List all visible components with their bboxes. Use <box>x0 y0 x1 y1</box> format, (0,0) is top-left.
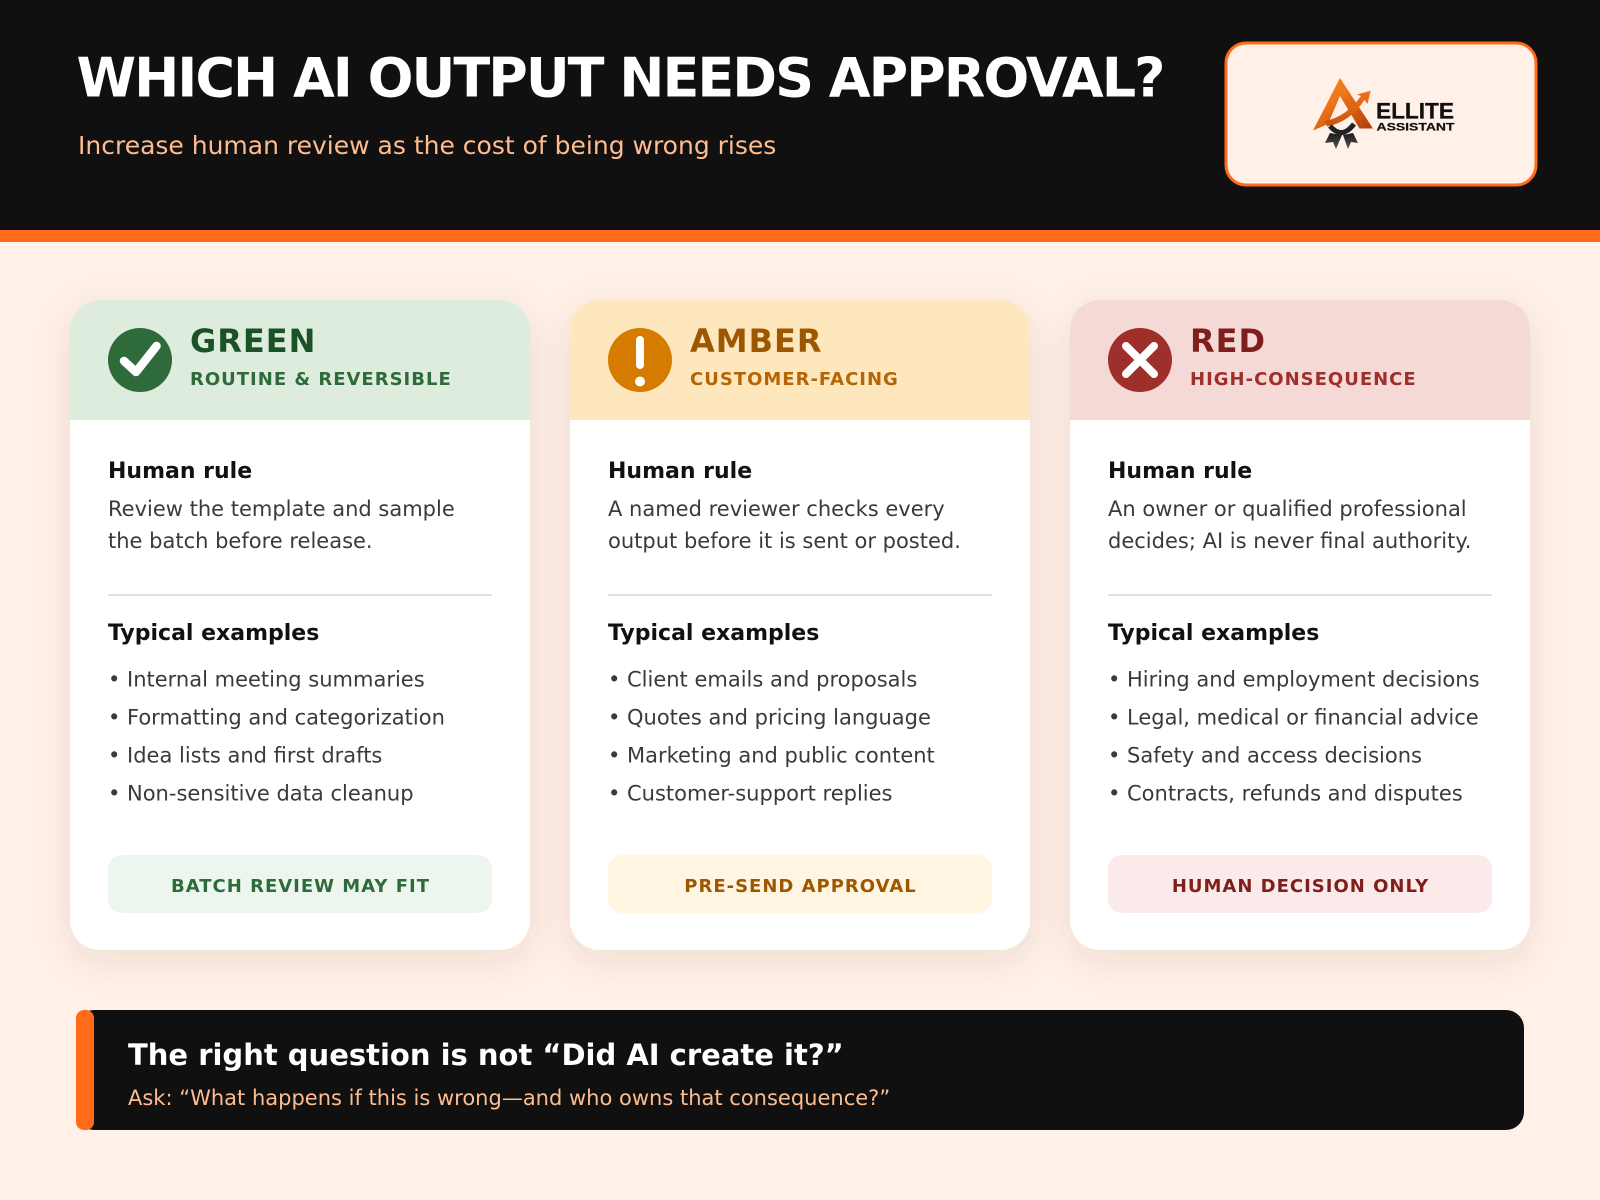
examples list: Client emails and proposals <box>627 668 917 692</box>
human rule heading: Human rule <box>108 459 252 484</box>
examples list: • <box>108 744 120 768</box>
amber header band <box>570 300 1030 420</box>
amber heading: AMBER <box>690 322 822 360</box>
divider <box>1108 594 1492 596</box>
examples list: • <box>108 782 120 806</box>
human rule text: An owner or qualified professional <box>1108 497 1467 521</box>
human rule text: the batch before release. <box>108 529 373 553</box>
examples list: • <box>1108 744 1120 768</box>
green action pill <box>108 855 492 913</box>
examples list: Marketing and public content <box>627 744 935 768</box>
green header band <box>70 300 530 420</box>
human rule heading: Human rule <box>1108 459 1252 484</box>
examples list: Idea lists and first drafts <box>127 744 382 768</box>
examples list <box>608 668 935 806</box>
red subheading: HIGH-CONSEQUENCE <box>1190 369 1417 390</box>
title: WHICH AI OUTPUT NEEDS APPROVAL? <box>76 46 1163 110</box>
logo wordmark <box>1376 98 1455 134</box>
icon: cross <box>1108 328 1172 392</box>
human rule text <box>608 497 961 553</box>
subtitle: Increase human review as the cost of being wrong rises <box>78 131 776 160</box>
examples list: • <box>608 668 620 692</box>
human rule text: A named reviewer checks every <box>608 497 945 521</box>
red action pill <box>1108 855 1492 913</box>
examples list: Internal meeting summaries <box>127 668 425 692</box>
examples list: • <box>608 706 620 730</box>
examples list: • <box>1108 782 1120 806</box>
examples list: • <box>1108 668 1120 692</box>
typical examples heading: Typical examples <box>608 621 819 646</box>
examples list: • <box>608 782 620 806</box>
human rule text: output before it is sent or posted. <box>608 529 961 553</box>
logo wordmark: ASSISTANT <box>1376 122 1455 134</box>
icon: exclamation <box>608 328 672 392</box>
examples list: Customer-support replies <box>627 782 892 806</box>
panel: green <box>70 300 530 950</box>
callout question: Ask: “What happens if this is wrong—and who owns that consequence?” <box>128 1086 890 1110</box>
callout heading: The right question is not “Did AI create it?” <box>128 1038 844 1072</box>
typical examples heading: Typical examples <box>108 621 319 646</box>
examples list: Formatting and categorization <box>127 706 445 730</box>
divider <box>108 594 492 596</box>
human rule heading: Human rule <box>608 459 752 484</box>
typical examples heading: Typical examples <box>1108 621 1319 646</box>
orange accent bar <box>76 1010 94 1130</box>
amber action pill <box>608 855 992 913</box>
human rule text <box>1108 497 1471 553</box>
amber action pill: PRE-SEND APPROVAL <box>684 876 917 897</box>
panel: red <box>1070 300 1530 950</box>
header band <box>0 0 1600 242</box>
logo wordmark: ELLITE <box>1376 98 1454 123</box>
logo card <box>1226 43 1536 185</box>
examples list: Safety and access decisions <box>1127 744 1422 768</box>
green heading: GREEN <box>190 322 316 360</box>
green action pill: BATCH REVIEW MAY FIT <box>171 876 430 897</box>
examples list <box>1108 668 1480 806</box>
examples list: • <box>108 706 120 730</box>
red action pill: HUMAN DECISION ONLY <box>1172 876 1429 897</box>
human rule text: decides; AI is never final authority. <box>1108 529 1471 553</box>
green subheading: ROUTINE & REVERSIBLE <box>190 369 452 390</box>
examples list: Legal, medical or financial advice <box>1127 706 1479 730</box>
icon: logo mark <box>1313 78 1373 149</box>
examples list: Contracts, refunds and disputes <box>1127 782 1463 806</box>
examples list <box>108 668 445 806</box>
examples list: Non-sensitive data cleanup <box>127 782 414 806</box>
human rule text: Review the template and sample <box>108 497 455 521</box>
divider <box>608 594 992 596</box>
red heading: RED <box>1190 322 1266 360</box>
examples list: Hiring and employment decisions <box>1127 668 1480 692</box>
examples list: Quotes and pricing language <box>627 706 931 730</box>
icon: check mark <box>108 328 172 392</box>
examples list: • <box>108 668 120 692</box>
examples list: • <box>608 744 620 768</box>
callout: bottom takeaway <box>76 1010 1524 1130</box>
examples list: • <box>1108 706 1120 730</box>
red header band <box>1070 300 1530 420</box>
amber subheading: CUSTOMER-FACING <box>690 369 899 390</box>
human rule text <box>108 497 455 553</box>
panel: amber <box>570 300 1030 950</box>
